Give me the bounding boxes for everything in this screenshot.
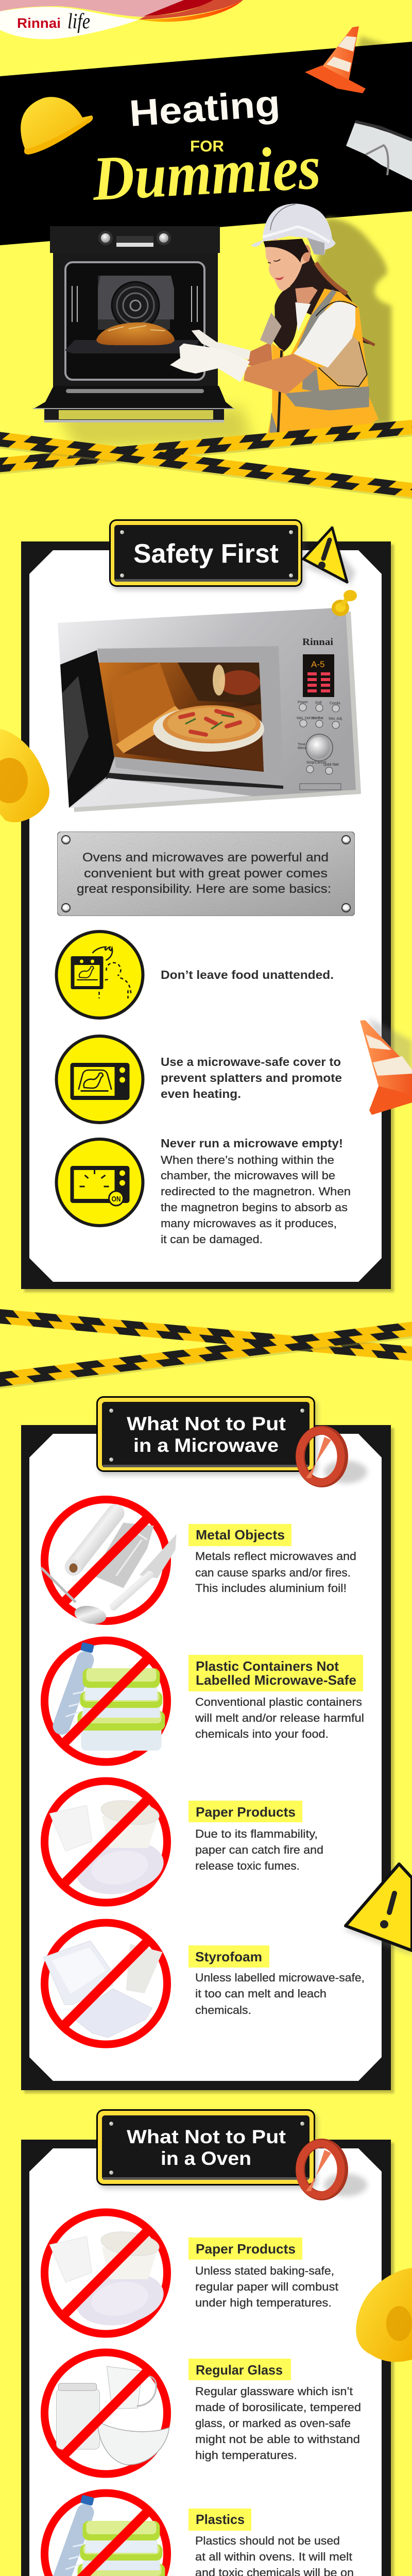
heading: what not to put in a oven: in a Oven <box>161 2148 251 2169</box>
caution tape pair 2 <box>0 1308 412 1390</box>
heading: safety first: Safety First <box>133 539 279 569</box>
text: microwave safe cover <box>161 1055 342 1100</box>
oven shadow <box>57 407 252 448</box>
heading: what not to put in a oven <box>96 2109 317 2189</box>
hero title: Heating <box>128 83 281 134</box>
paper products title <box>188 1801 302 1822</box>
icon: push pin <box>332 590 357 620</box>
plastics text <box>195 2534 354 2576</box>
paper products oven text: under high temperatures. <box>195 2296 332 2309</box>
paper products oven title <box>188 2238 302 2260</box>
photo: microwave with pizza <box>58 607 361 812</box>
logo text: life <box>67 10 90 33</box>
no sign: plastics <box>44 2493 167 2576</box>
microwave control panel: Stop/Cancel <box>306 761 327 765</box>
microwave control panel: Power <box>298 701 308 704</box>
heading: what not to put in a microwave: What Not to Put <box>127 1413 286 1434</box>
pizza on plate <box>153 705 264 752</box>
no sign: regular glass <box>44 2352 169 2474</box>
icon: no sign oven <box>300 2143 367 2196</box>
heading: what not to put in a oven: What Not to Put <box>127 2126 286 2147</box>
intro text: great responsibility. Here are some basics: <box>77 882 331 896</box>
icon: empty microwave on <box>57 1139 143 1226</box>
icon: microwave with cover <box>57 1036 143 1123</box>
no sign: styrofoam <box>43 1923 167 2044</box>
logo text <box>17 10 90 33</box>
baking tray <box>65 340 200 353</box>
intro text: convenient but with great power comes <box>84 867 328 880</box>
text: microwave safe cover: prevent splatters and promote <box>161 1071 342 1084</box>
text: never run empty: it can be damaged. <box>161 1233 263 1246</box>
paper products oven text: regular paper will combust <box>195 2280 338 2293</box>
plastic containers title: Labelled Microwave-Safe <box>196 1672 356 1688</box>
plastic containers text: will melt and/or release harmful <box>195 1711 364 1724</box>
icon: yellow helmet left <box>0 729 49 822</box>
plastic containers text: chemicals into your food. <box>195 1727 329 1740</box>
microwave control panel: Grill <box>315 701 322 705</box>
plastic containers text <box>195 1696 364 1740</box>
plastics title <box>188 2509 251 2531</box>
regular glass title <box>188 2359 291 2380</box>
icon: warning triangle <box>303 528 355 585</box>
intro text <box>77 851 331 896</box>
no sign: paper products <box>44 1781 168 1903</box>
icon: traffic cone <box>305 26 391 93</box>
text: never run empty <box>161 1137 351 1246</box>
styrofoam title: Styrofoam <box>195 1949 262 1964</box>
logo text: Rinnai <box>17 15 61 31</box>
bread loaf <box>96 323 175 345</box>
microwave door <box>60 650 114 808</box>
text: never run empty: redirected to the magnetron. When <box>161 1185 351 1198</box>
plastic containers title <box>188 1655 363 1691</box>
hero: black title band <box>0 42 412 245</box>
hero title <box>90 83 322 214</box>
styrofoam title <box>188 1945 269 1968</box>
metal objects text: Metals reflect microwaves and <box>195 1550 356 1563</box>
styrofoam text: Unless labelled microwave-safe, <box>195 1971 365 1984</box>
styrofoam text <box>195 1971 365 2016</box>
icon: no sign <box>300 1430 367 1483</box>
open oven door <box>33 386 234 422</box>
text: never run empty: the magnetron begins to absorb as <box>161 1201 348 1214</box>
microwave control panel: Time <box>298 743 305 747</box>
oven controls <box>98 231 171 247</box>
icon: yellow helmet right <box>356 2268 412 2362</box>
text: never run empty: many microwaves as it produces, <box>161 1217 337 1230</box>
text: microwave safe cover: Use a microwave-safe cover to <box>161 1055 341 1069</box>
microwave control panel: Wei. Def. <box>297 717 312 720</box>
heading: safety first <box>109 519 304 590</box>
no sign: plastic containers <box>44 1640 167 1762</box>
panel: what not to put in a oven <box>21 2140 394 2576</box>
metal objects title <box>188 1524 291 1546</box>
icon: empty microwave on: ON <box>111 1195 121 1204</box>
styrofoam text: chemicals. <box>195 2004 251 2016</box>
logo banner <box>0 0 243 39</box>
paper products text <box>195 1827 323 1872</box>
regular glass title: Regular Glass <box>196 2362 283 2378</box>
plastic containers title: Plastic Containers Not <box>196 1658 339 1674</box>
microwave cavity <box>98 663 264 772</box>
plastics title: Plastics <box>196 2512 245 2527</box>
plastics text: Plastics should not be used <box>195 2534 340 2547</box>
intro text: Ovens and microwaves are powerful and <box>82 851 329 865</box>
illustration: oven with bread <box>33 226 234 422</box>
icon: traffic cone right <box>360 1018 412 1115</box>
regular glass text: high temperatures. <box>195 2449 297 2462</box>
paper products text: paper can catch fire and <box>195 1843 323 1856</box>
metal objects title: Metal Objects <box>196 1527 285 1543</box>
microwave control panel: A-5 <box>311 659 324 669</box>
microwave control panel: Rinnai <box>302 637 333 648</box>
paper products oven text <box>195 2264 338 2309</box>
paper products title: Paper Products <box>196 1804 296 1820</box>
paper products oven text: Unless stated baking-safe, <box>195 2264 334 2277</box>
icon: safety goggles <box>346 122 412 180</box>
heading: what not to put in a microwave <box>96 1396 317 1475</box>
paper products text: Due to its flammability, <box>195 1827 318 1840</box>
styrofoam text: it too can melt and leach <box>195 1987 327 2000</box>
regular glass text: might not be able to withstand <box>195 2433 360 2446</box>
no sign: paper products oven <box>44 2212 168 2334</box>
hero title: FOR <box>190 137 224 155</box>
no sign: metal objects <box>42 1499 176 1626</box>
microwave control panel: Combi. <box>330 702 341 705</box>
metal objects text: This includes aluminium foil! <box>195 1582 347 1595</box>
paper products oven title: Paper Products <box>196 2241 296 2257</box>
regular glass text: Regular glassware which isn’t <box>195 2385 353 2398</box>
plastics text: at all within ovens. It will melt <box>195 2550 352 2563</box>
metal objects text: can cause sparks and/or fires. <box>195 1566 351 1579</box>
icon: large warning triangle <box>342 1864 412 1955</box>
heading: what not to put in a microwave: in a Microwave <box>133 1435 279 1456</box>
metal plate: intro <box>57 832 355 916</box>
icon: yellow helmet <box>21 97 93 155</box>
oven fan <box>112 282 159 329</box>
microwave control panel: Quick Start <box>323 763 339 767</box>
metal objects text <box>195 1550 356 1595</box>
panel: safety first <box>21 541 394 1292</box>
microwave control panel: Menu <box>298 747 307 750</box>
paper products text: release toxic fumes. <box>195 1859 300 1872</box>
hero title: Dummies <box>90 132 322 214</box>
icon: oven unattended <box>57 931 143 1018</box>
panel: what not to put in a microwave <box>21 1425 394 2093</box>
text: never run empty: When there’s nothing within the <box>161 1154 334 1166</box>
text: dont leave food: Don’t leave food unattended. <box>161 968 334 981</box>
microwave frame <box>97 646 284 789</box>
plastic containers text: Conventional plastic containers <box>195 1696 362 1708</box>
regular glass text: glass, or marked as oven-safe <box>195 2417 351 2430</box>
text: microwave safe cover: even heating. <box>161 1087 241 1100</box>
text: never run empty: Never run a microwave empty! <box>161 1137 343 1150</box>
caution tape pair 1 <box>0 418 412 501</box>
regular glass text: made of borosilicate, tempered <box>195 2401 361 2414</box>
microwave control panel: Kitchen Timer <box>311 717 324 720</box>
text: never run empty: chamber, the microwaves will be <box>161 1169 335 1182</box>
illustration: woman in hard hat and safety vest <box>170 204 391 433</box>
microwave control panel: Wei. Adj. <box>329 717 343 721</box>
microwave control panel <box>297 637 343 790</box>
regular glass text <box>195 2385 361 2462</box>
